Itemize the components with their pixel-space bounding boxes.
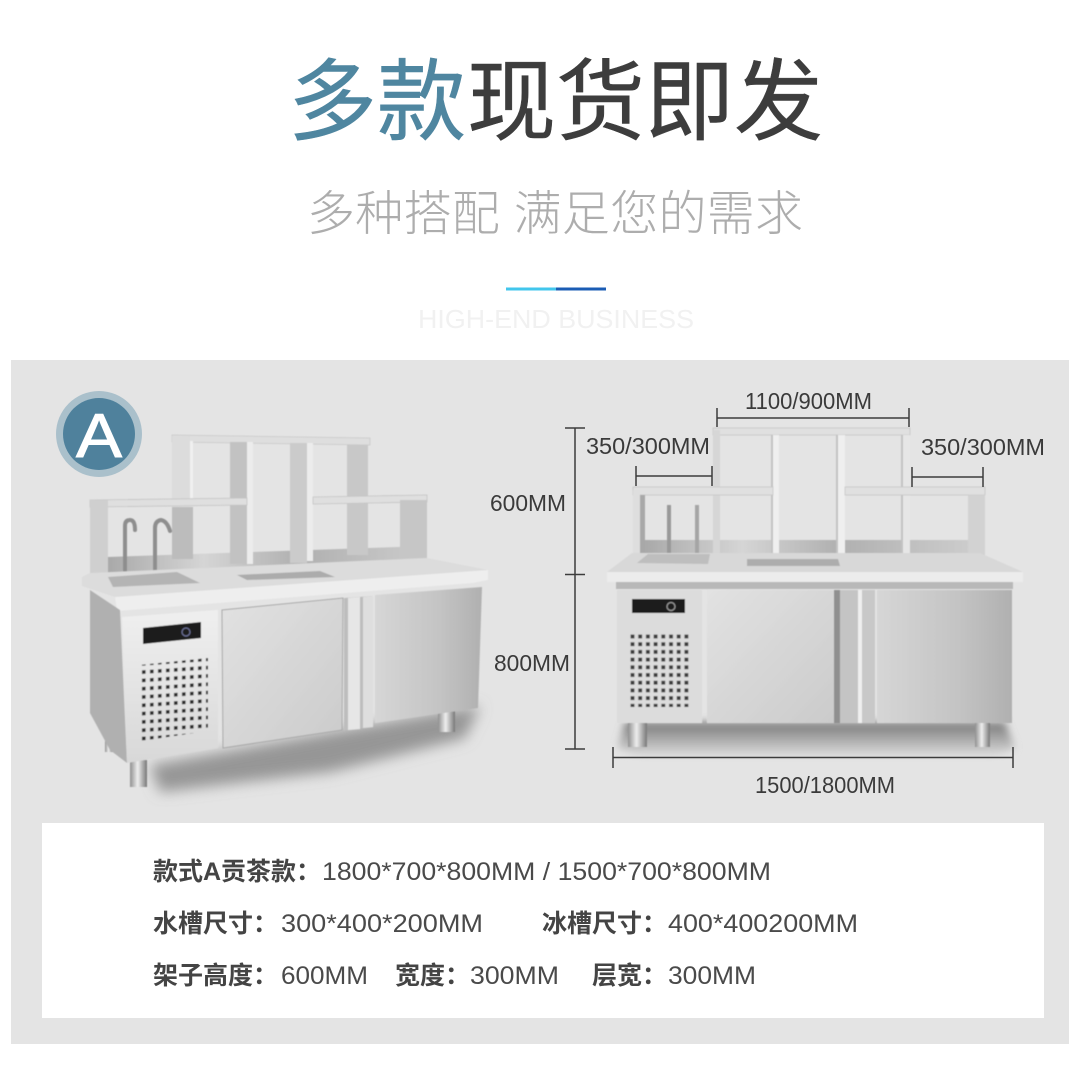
under counter shade [616, 582, 1013, 589]
faucets [667, 505, 699, 553]
dimension labels [490, 388, 1045, 798]
pillars [834, 590, 875, 723]
feet [628, 723, 990, 747]
shelf frame [633, 428, 985, 555]
badge A [56, 391, 142, 477]
spec row 2: 冰槽尺寸： [542, 910, 667, 938]
vent [139, 658, 208, 741]
spec row 2: 水槽尺寸： [153, 910, 278, 938]
spec box [42, 823, 1044, 1018]
dimension labels: 350/300MM [921, 434, 1045, 460]
spec row 3: 600MM [281, 962, 368, 990]
door right [375, 587, 482, 723]
spec row 3: 架子高度： [153, 962, 278, 990]
door left [222, 598, 343, 748]
spec row 1 [153, 858, 771, 886]
ice well [237, 571, 335, 580]
dimension lines [565, 408, 1013, 768]
compressor panel [617, 590, 702, 723]
counter top [607, 553, 1023, 582]
panel: product A [11, 360, 1069, 1044]
feet [105, 708, 455, 787]
faucets [125, 520, 170, 572]
floor shadow [618, 722, 1015, 756]
subtitle: 多种搭配 满足您的需求 [307, 188, 803, 241]
door left [707, 590, 834, 723]
cabinet side [90, 590, 127, 763]
spec row 3: 300MM [470, 962, 559, 990]
dimension labels: 1100/900MM [745, 388, 872, 414]
spec row 1: 款式A贡茶款： [153, 858, 321, 886]
ice well [747, 559, 840, 566]
spec row 3 [153, 962, 756, 990]
spec row 2: 400*400200MM [668, 910, 858, 938]
display [632, 599, 685, 613]
dimension labels: 350/300MM [586, 433, 710, 459]
sink [108, 572, 200, 587]
floor shadow [150, 706, 480, 792]
dimension labels: 800MM [494, 650, 570, 676]
spec row 3: 300MM [668, 962, 756, 990]
sink [637, 554, 710, 564]
vent [629, 633, 691, 707]
upper shelf frame [90, 435, 427, 580]
power icon [667, 602, 675, 610]
pillar [344, 596, 373, 730]
counter top [82, 558, 488, 610]
spec row 3: 层宽： [592, 962, 667, 990]
title: 现货即发 [467, 52, 823, 152]
title [288, 52, 823, 152]
compressor panel [122, 610, 218, 763]
spec row 2: 300*400*200MM [281, 910, 483, 938]
spec row 2 [153, 910, 858, 938]
splash back [645, 540, 968, 554]
accent line [506, 288, 606, 290]
display [143, 622, 201, 644]
spec row 1: 1800*700*800MM / 1500*700*800MM [322, 858, 771, 886]
title: 多款 [288, 52, 466, 152]
power icon [182, 628, 190, 636]
product photo: angled counter [82, 435, 488, 792]
door right [877, 590, 1012, 723]
product photo: front view [607, 428, 1023, 756]
english caption: HIGH-END BUSINESS [418, 304, 694, 334]
badge A: A [76, 402, 123, 471]
spec row 3: 宽度： [395, 962, 470, 990]
dimension labels: 1500/1800MM [755, 772, 895, 798]
dimension labels: 600MM [490, 490, 566, 516]
